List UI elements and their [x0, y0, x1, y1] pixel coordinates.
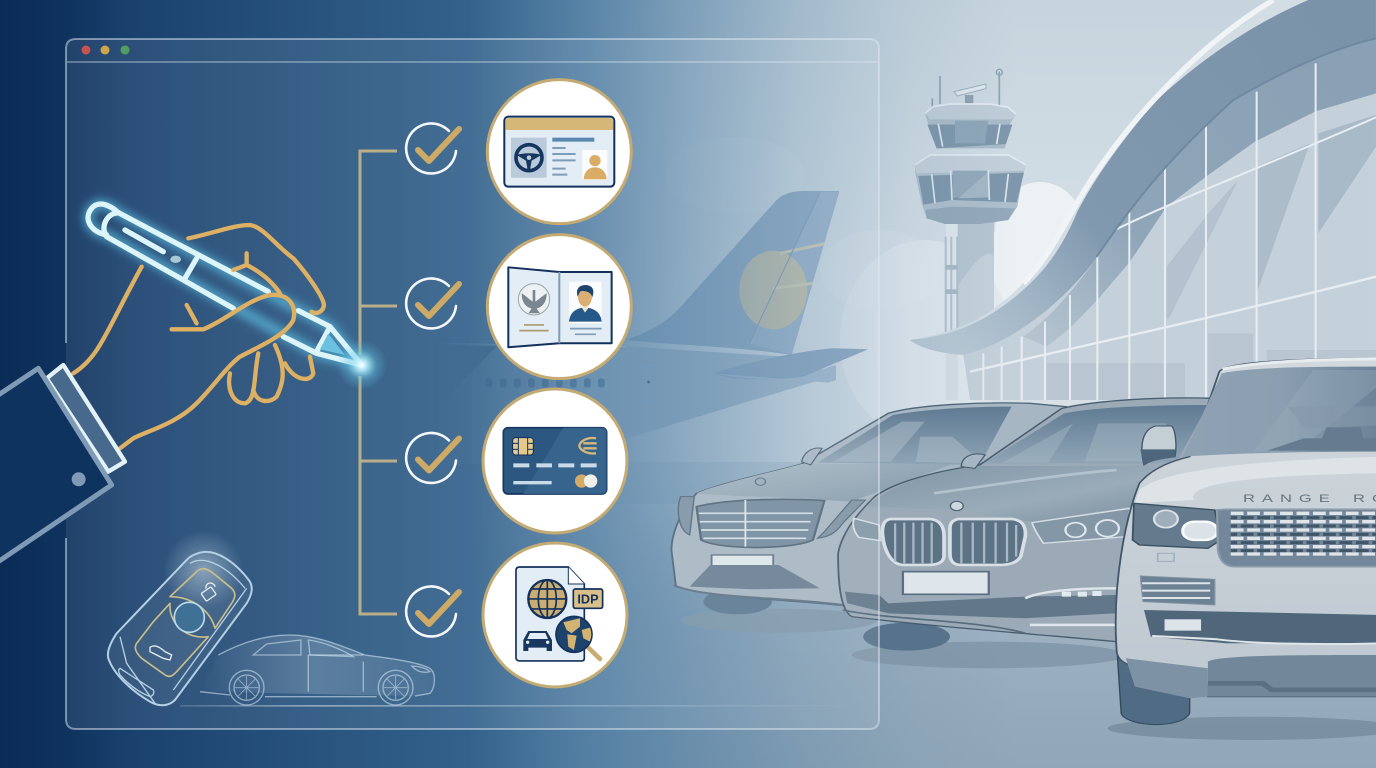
icon: international driving permit: IDP [577, 592, 599, 606]
BMW kidney grille [882, 519, 944, 565]
hand holding glowing pen [0, 204, 387, 565]
IDP tag [573, 589, 603, 608]
shirt cuff [47, 365, 125, 472]
BMW licence plate [903, 572, 989, 594]
airplane fuselage details above overlay [433, 343, 707, 467]
Range Rover headlight [1133, 503, 1221, 548]
lock symbol [201, 583, 216, 601]
Range Rover badge text: RANGE [1243, 492, 1337, 504]
glowing halo around pen [88, 204, 362, 365]
horizon band [500, 462, 920, 504]
ground shading [0, 500, 1376, 768]
checkmark 2 [406, 278, 459, 328]
icon: passport [487, 235, 631, 379]
suit sleeve [0, 368, 112, 565]
Range Rover side vent [1140, 576, 1215, 605]
outline car and ground line [180, 635, 847, 707]
airplane tail [606, 191, 868, 438]
plane door [633, 362, 656, 407]
Range Rover grille [1217, 509, 1376, 567]
airport control tower [915, 69, 1026, 400]
plane windows [486, 378, 605, 388]
Range Rover lower intake [1144, 610, 1376, 643]
terminal glass facade [963, 38, 1376, 400]
window dot gold [100, 46, 110, 54]
airport terminal building [910, 0, 1376, 400]
globe [528, 580, 566, 618]
checkmark 3 [406, 433, 459, 483]
sleeve button [72, 472, 86, 486]
Mercedes grille [697, 499, 824, 547]
car: silver Mercedes sedan [671, 403, 1071, 633]
small car [523, 631, 552, 651]
pen [88, 204, 362, 365]
Mercedes licence plate [712, 555, 773, 573]
window dot red [82, 46, 90, 54]
icon: credit card [483, 389, 627, 533]
icon: driving licence [487, 80, 631, 224]
trunk car symbol [150, 646, 172, 660]
terminal curved roof [910, 0, 1376, 355]
magnifier [587, 647, 600, 659]
pen tip spark [337, 340, 387, 390]
window dot green [120, 46, 130, 54]
fob gold buttons [135, 569, 235, 676]
checklist connector bracket [360, 151, 397, 614]
browser window panel [66, 39, 879, 729]
checkmark 1 [406, 123, 459, 173]
car: grey BMW sedan [838, 398, 1212, 668]
checkmark 4 [406, 586, 459, 636]
icon: international driving permit [483, 543, 627, 687]
car: white Range Rover SUV [1107, 358, 1376, 740]
gold hand outline [73, 225, 324, 448]
car key fob [108, 530, 252, 705]
background clouds [665, 137, 1090, 440]
